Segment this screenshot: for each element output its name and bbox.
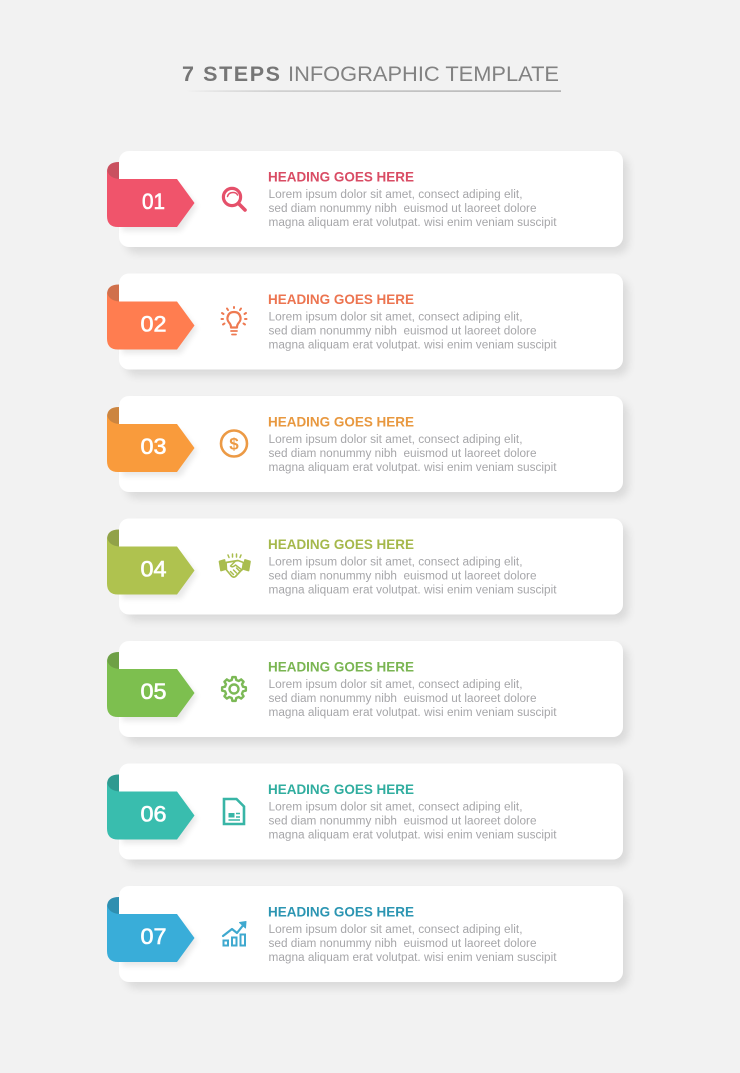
body 04 <box>268 556 557 596</box>
body 04: sed diam nonummy nibh euismod ut laoreet dolore <box>268 570 536 582</box>
number 04: 04 <box>140 556 166 582</box>
body 01: magna aliquam erat volutpat. wisi enim veniam suscipit <box>268 217 557 229</box>
step 05 <box>107 641 628 743</box>
step 07 <box>107 886 628 988</box>
card 07 <box>119 886 623 982</box>
heading 06: HEADING GOES HERE <box>268 781 414 797</box>
body 06: Lorem ipsum dolor sit amet, consect adiping elit, <box>268 802 522 814</box>
icon: growth chart <box>223 922 246 946</box>
heading 04: HEADING GOES HERE <box>268 536 414 552</box>
body 05: sed diam nonummy nibh euismod ut laoreet dolore <box>268 693 536 705</box>
title: 7 STEPS <box>182 62 280 86</box>
number 05: 05 <box>140 679 166 704</box>
heading 03: HEADING GOES HERE <box>268 414 414 430</box>
number 07: 07 <box>140 924 166 949</box>
ribbon 05 <box>107 652 194 717</box>
heading 01: HEADING GOES HERE <box>268 168 414 184</box>
number 03: 03 <box>140 434 166 459</box>
body 07 <box>268 924 557 964</box>
card 01 <box>119 151 623 247</box>
step 04 <box>107 518 628 620</box>
ribbon 07 <box>107 897 194 962</box>
title: INFOGRAPHIC TEMPLATE <box>288 62 559 86</box>
ribbon 02 <box>107 284 194 350</box>
number 01: 01 <box>142 189 165 214</box>
body 05 <box>268 679 557 719</box>
body 02: sed diam nonummy nibh euismod ut laoreet dolore <box>268 326 536 338</box>
icon: magnifier <box>223 188 245 210</box>
number 02: 02 <box>140 312 166 336</box>
ribbon 01 <box>107 162 194 227</box>
step 06 <box>107 764 628 866</box>
body 06: magna aliquam erat volutpat. wisi enim veniam suscipit <box>268 830 557 842</box>
body 05: Lorem ipsum dolor sit amet, consect adiping elit, <box>268 679 522 691</box>
body 02: Lorem ipsum dolor sit amet, consect adiping elit, <box>268 312 522 324</box>
icon: light bulb <box>222 307 246 334</box>
step 01 <box>107 151 628 253</box>
body 07: magna aliquam erat volutpat. wisi enim veniam suscipit <box>268 952 557 964</box>
heading 05: HEADING GOES HERE <box>268 658 414 674</box>
icon: gear <box>222 677 246 701</box>
step 03 <box>107 396 628 498</box>
body 07: sed diam nonummy nibh euismod ut laoreet dolore <box>268 938 536 950</box>
heading 02: HEADING GOES HERE <box>268 291 414 307</box>
card 06 <box>119 764 623 860</box>
ribbon 03 <box>107 407 194 472</box>
icon: dollar coin: $ <box>229 434 239 454</box>
body 07: Lorem ipsum dolor sit amet, consect adiping elit, <box>268 924 522 936</box>
step 02 <box>107 274 628 376</box>
body 06: sed diam nonummy nibh euismod ut laoreet dolore <box>268 816 536 828</box>
heading 07: HEADING GOES HERE <box>268 904 414 920</box>
body 03: sed diam nonummy nibh euismod ut laoreet dolore <box>268 448 536 460</box>
card 02 <box>119 274 623 370</box>
icon: dollar coin <box>221 430 247 456</box>
number 06: 06 <box>140 802 166 826</box>
body 04: magna aliquam erat volutpat. wisi enim veniam suscipit <box>268 584 557 596</box>
card 04 <box>119 518 623 614</box>
ribbon 04 <box>107 530 194 594</box>
body 06 <box>268 802 557 842</box>
card 03 <box>119 396 623 492</box>
icon: document <box>224 799 244 824</box>
body 03: magna aliquam erat volutpat. wisi enim veniam suscipit <box>268 462 557 474</box>
ribbon 06 <box>107 774 194 840</box>
icon: handshake <box>220 554 250 577</box>
body 04: Lorem ipsum dolor sit amet, consect adiping elit, <box>268 556 522 568</box>
body 05: magna aliquam erat volutpat. wisi enim veniam suscipit <box>268 707 557 719</box>
body 02 <box>268 312 557 352</box>
card 05 <box>119 641 623 737</box>
body 03 <box>268 434 557 474</box>
body 01: Lorem ipsum dolor sit amet, consect adiping elit, <box>268 189 522 201</box>
body 01: sed diam nonummy nibh euismod ut laoreet dolore <box>268 203 536 215</box>
body 01 <box>268 189 557 229</box>
body 03: Lorem ipsum dolor sit amet, consect adiping elit, <box>268 434 522 446</box>
body 02: magna aliquam erat volutpat. wisi enim veniam suscipit <box>268 340 557 352</box>
